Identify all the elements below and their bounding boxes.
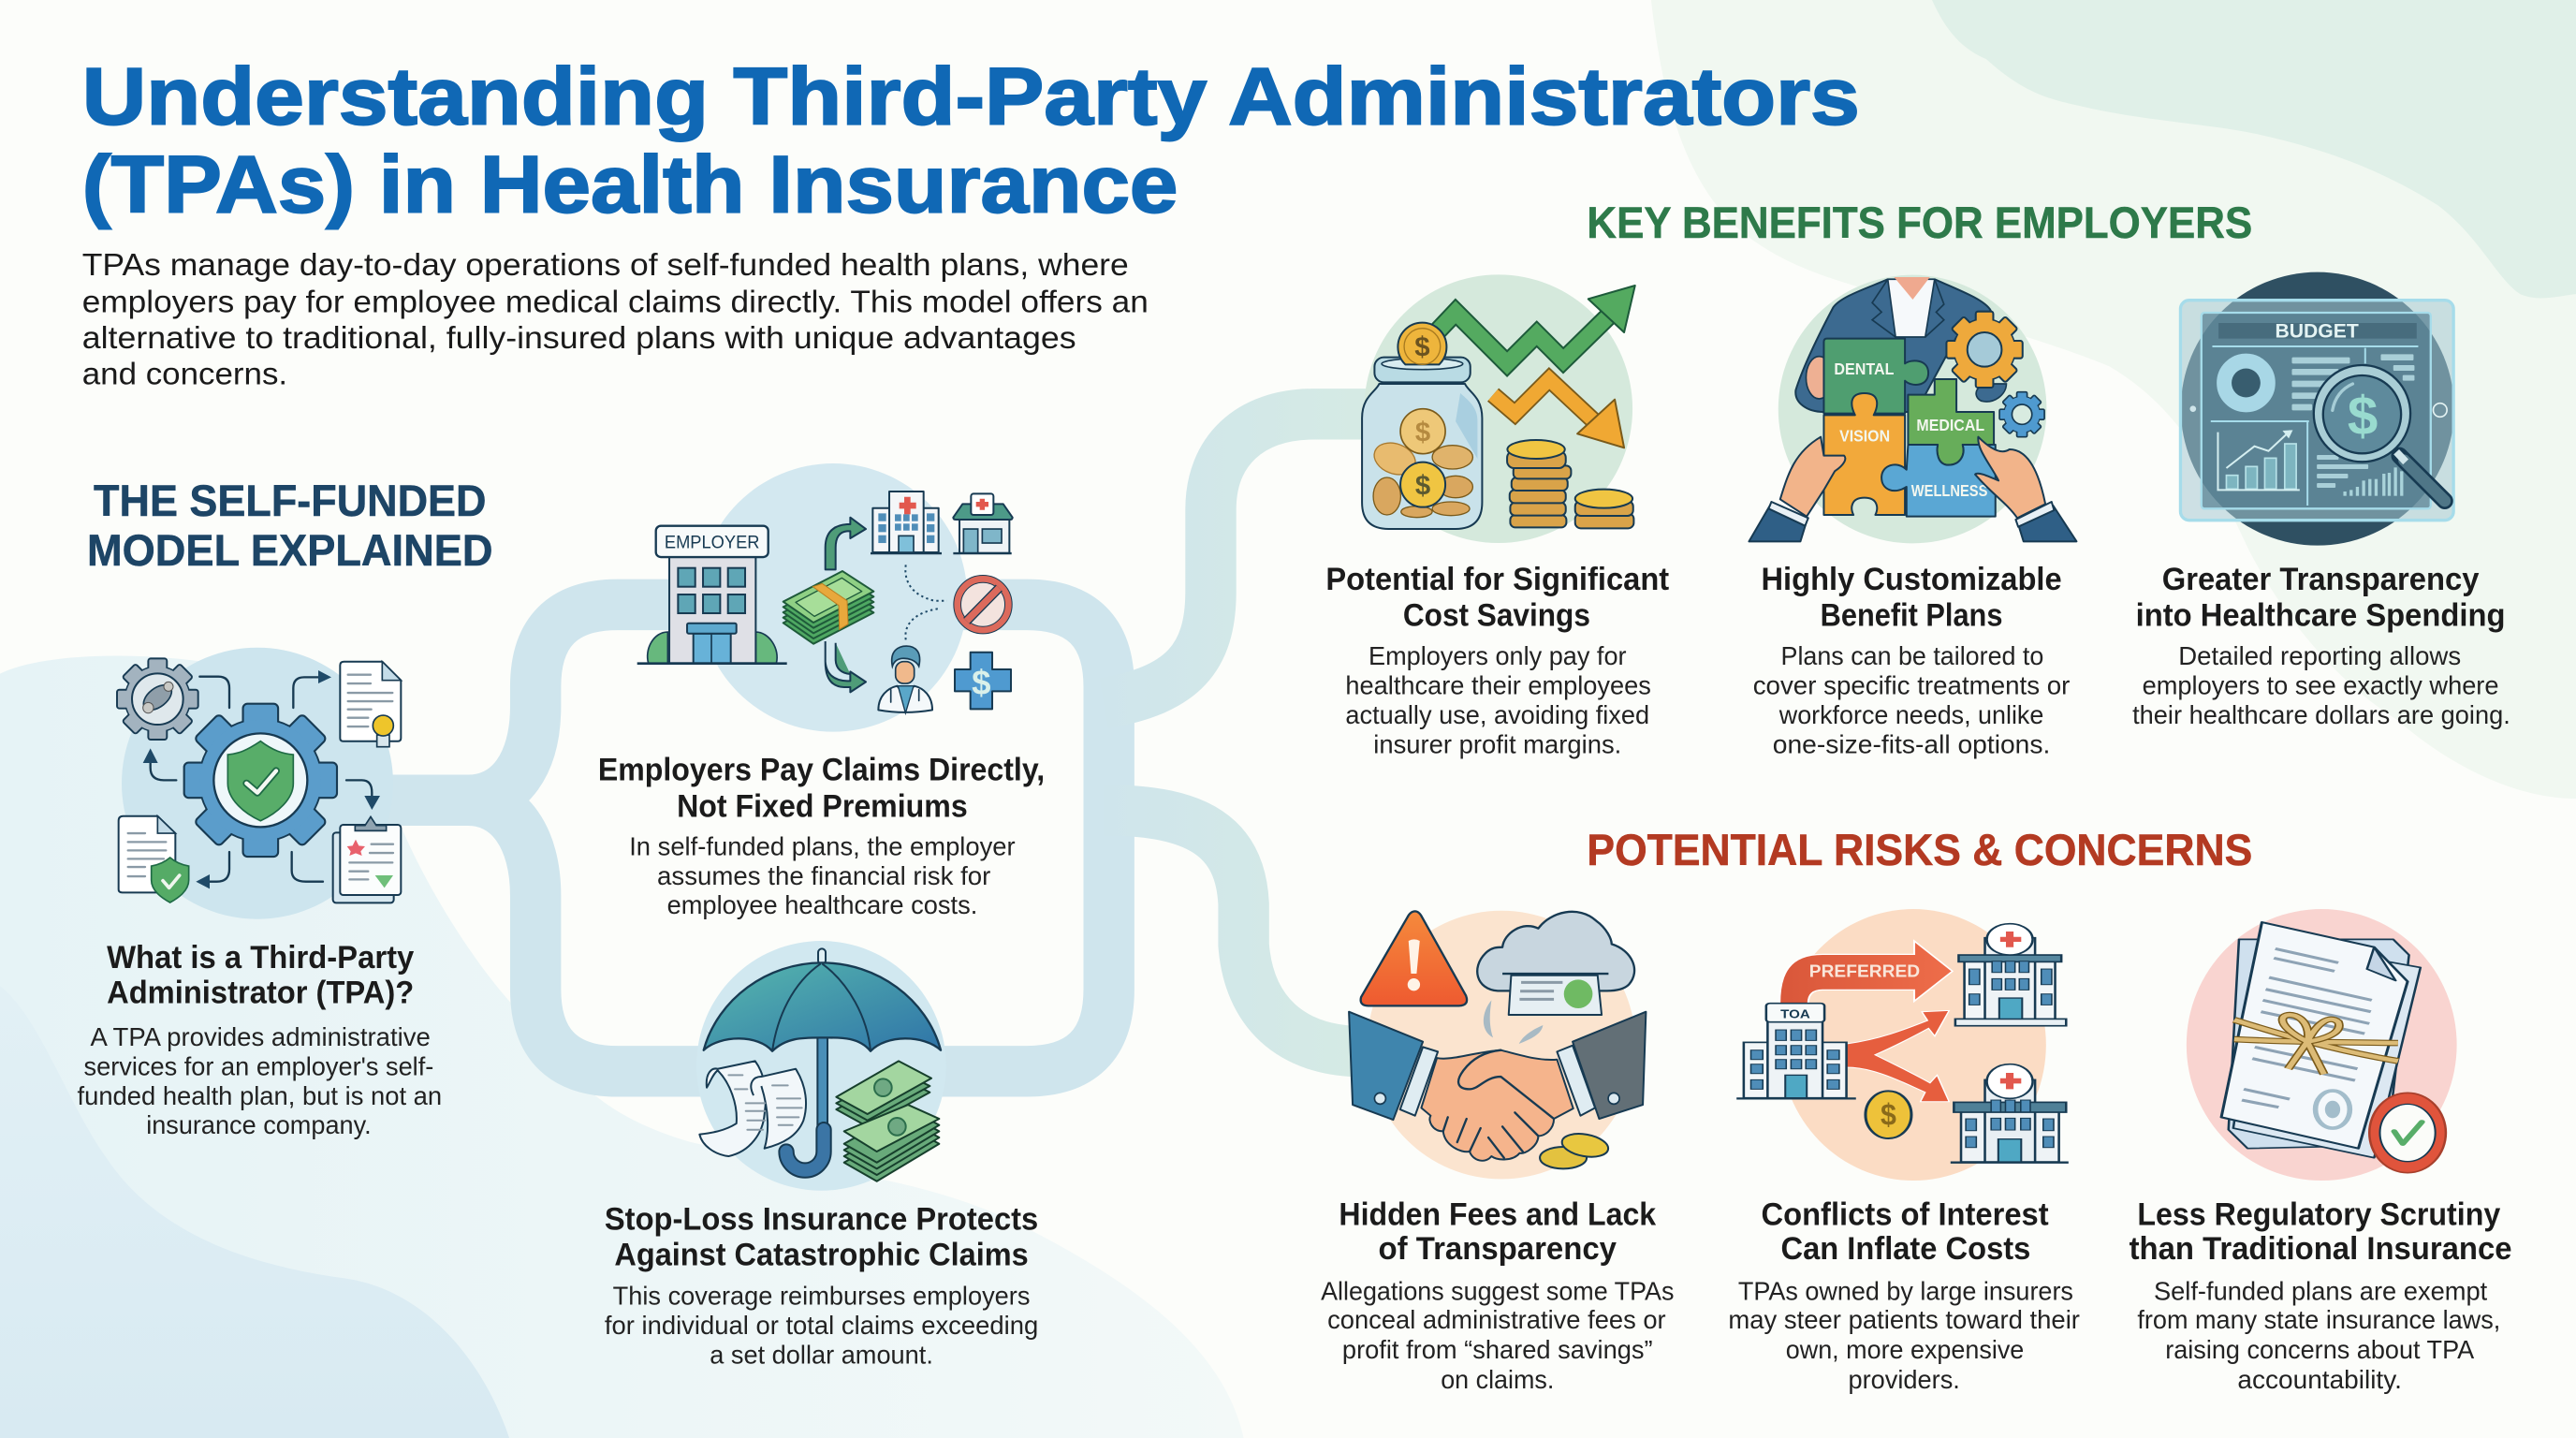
body text [77, 1022, 442, 1139]
intro paragraph: TPAs manage day-to-day operations of self-funded health plans, where [82, 248, 1129, 283]
background blob: darker green [1932, 0, 2576, 298]
panel: conflicts of interest [1728, 909, 2080, 1394]
panel: employers pay claims directly [598, 463, 1045, 919]
body text: workforce needs, unlike [1778, 700, 2043, 729]
panel: transparency [2132, 272, 2510, 729]
heading: Can Inflate Costs [1781, 1231, 2030, 1267]
icon: puzzle pieces, hands and suit: DENTAL [1834, 360, 1895, 378]
body text [1321, 1276, 1674, 1394]
intro paragraph: alternative to traditional, fully-insured plans with unique advantages [82, 321, 1076, 356]
body text [1753, 641, 2070, 759]
icon: employer paying hospitals and doctors: EMPLOYER [665, 533, 760, 552]
body text: their healthcare dollars are going. [2132, 700, 2510, 729]
body text: accountability. [2237, 1365, 2402, 1394]
panel: customizable plans [1749, 275, 2076, 759]
background blob: darker blue [0, 986, 509, 1438]
heading: Hidden Fees and Lack [1339, 1196, 1657, 1232]
icon: coin jar and trend arrows: $ [1414, 332, 1430, 363]
flow track: branch to risks [1104, 810, 1397, 1051]
panel: cost savings [1325, 274, 1670, 759]
body text: profit from “shared savings” [1342, 1335, 1653, 1364]
icon: puzzle pieces, hands and suit [1749, 275, 2076, 543]
body text: own, more expensive [1786, 1335, 2024, 1364]
heading: Not Fixed Premiums [677, 788, 968, 824]
icon: preferred arrow from TPA to hospitals: TOA [1780, 1006, 1810, 1020]
heading: than Traditional Insurance [2130, 1231, 2512, 1267]
panel: stop-loss insurance [605, 941, 1038, 1370]
icon: coin jar and trend arrows [1362, 274, 1635, 543]
heading [605, 1202, 1038, 1272]
icon: budget dashboard tablet [2180, 272, 2454, 546]
heading: Greater Transparency [2162, 562, 2479, 597]
heading: Employers Pay Claims Directly, [598, 753, 1045, 788]
panel: what is a TPA [77, 648, 442, 1139]
intro paragraph: employers pay for employee medical claims directly. This model offers an [82, 285, 1149, 319]
flow track: self-funded model loop [386, 605, 1109, 1071]
heading: Highly Customizable [1761, 562, 2062, 597]
icon: tied documents with seal [2187, 909, 2457, 1181]
body text: This coverage reimburses employers [613, 1282, 1030, 1311]
icon: TPA gears and documents [117, 648, 401, 919]
icon: preferred arrow from TPA to hospitals: $ [1881, 1098, 1896, 1132]
body text: Detailed reporting allows [2178, 641, 2461, 670]
icon: puzzle pieces, hands and suit: WELLNESS [1911, 481, 1987, 500]
body text [605, 1282, 1038, 1370]
background blob: light blue [0, 655, 1244, 1438]
heading: the self-funded model: MODEL EXPLAINED [87, 526, 493, 576]
heading: into Healthcare Spending [2136, 598, 2506, 634]
body text: healthcare their employees [1345, 670, 1651, 699]
title [82, 51, 1860, 229]
icon: budget dashboard tablet: $ [2348, 386, 2378, 447]
intro paragraph [82, 248, 1149, 392]
heading: Less Regulatory Scrutiny [2137, 1196, 2500, 1232]
flow track: branch to benefits [1104, 414, 1397, 703]
icon: preferred arrow from TPA to hospitals [1736, 909, 2069, 1181]
icon: coin jar and trend arrows: $ [1415, 471, 1430, 502]
body text: A TPA provides administrative [91, 1022, 431, 1051]
section heading: key benefits: KEY BENEFITS FOR EMPLOYERS [1587, 198, 2252, 248]
heading: Conflicts of Interest [1761, 1196, 2049, 1232]
heading: What is a Third-Party [107, 940, 414, 976]
icon: puzzle pieces, hands and suit: MEDICAL [1916, 416, 1984, 434]
body text: assumes the financial risk for [657, 861, 990, 890]
panel: less regulatory scrutiny [2130, 909, 2512, 1394]
heading: of Transparency [1379, 1231, 1617, 1267]
body text [1345, 641, 1651, 759]
icon: employer paying hospitals and doctors [637, 463, 1013, 732]
background blob: light green [1651, 0, 2576, 799]
body text: providers. [1848, 1365, 1960, 1394]
body text: cover specific treatments or [1753, 670, 2070, 699]
heading [598, 753, 1045, 824]
body text [1728, 1276, 2080, 1394]
body text: services for an employer's self- [84, 1052, 433, 1081]
body text: TPAs owned by large insurers [1738, 1276, 2073, 1305]
icon: employer paying hospitals and doctors: $ [972, 664, 991, 702]
heading [1761, 562, 2062, 634]
body text: insurer profit margins. [1373, 730, 1621, 759]
heading: Administrator (TPA)? [107, 976, 414, 1011]
body text [2137, 1276, 2500, 1394]
body text: actually use, avoiding fixed [1345, 700, 1649, 729]
icon: coin jar and trend arrows: $ [1415, 418, 1430, 448]
icon: handshake with warning sign and cloud [1349, 911, 1646, 1179]
body text: for individual or total claims exceeding [605, 1311, 1038, 1340]
heading: Against Catastrophic Claims [614, 1237, 1029, 1272]
heading [1339, 1196, 1657, 1267]
heading: Potential for Significant [1325, 562, 1670, 597]
heading [1761, 1196, 2049, 1267]
heading: Cost Savings [1403, 598, 1590, 634]
heading: the self-funded model [87, 477, 493, 576]
body text [629, 831, 1016, 919]
body text: one-size-fits-all options. [1773, 730, 2050, 759]
body text: Allegations suggest some TPAs [1321, 1276, 1674, 1305]
heading: Stop-Loss Insurance Protects [605, 1202, 1038, 1238]
icon: umbrella over claims and cash [696, 941, 946, 1191]
title: (TPAs) in Health Insurance [82, 139, 1178, 229]
intro paragraph: and concerns. [82, 358, 287, 392]
body text: employers to see exactly where [2143, 670, 2499, 699]
body text: funded health plan, but is not an [77, 1081, 442, 1110]
heading [107, 940, 414, 1011]
panel: hidden fees [1321, 911, 1674, 1394]
body text: Employers only pay for [1368, 641, 1627, 670]
heading: the self-funded model: THE SELF-FUNDED [94, 477, 487, 526]
icon: preferred arrow from TPA to hospitals: PREFERRED [1809, 961, 1920, 981]
heading: Benefit Plans [1821, 598, 2002, 634]
body text: Self-funded plans are exempt [2154, 1276, 2487, 1305]
heading [2136, 562, 2506, 634]
body text: may steer patients toward their [1728, 1305, 2080, 1334]
body text: on claims. [1441, 1365, 1554, 1394]
body text: from many state insurance laws, [2137, 1305, 2500, 1334]
body text [2132, 641, 2510, 729]
title: Understanding Third-Party Administrators [82, 51, 1860, 141]
icon: puzzle pieces, hands and suit: VISION [1839, 427, 1890, 446]
body text: insurance company. [146, 1110, 372, 1139]
heading [2130, 1196, 2512, 1267]
section heading: risks: POTENTIAL RISKS & CONCERNS [1587, 826, 2252, 875]
body text: In self-funded plans, the employer [629, 831, 1016, 860]
body text: Plans can be tailored to [1781, 641, 2043, 670]
body text: a set dollar amount. [710, 1341, 933, 1370]
body text: conceal administrative fees or [1327, 1305, 1666, 1334]
icon: budget dashboard tablet: BUDGET [2275, 320, 2359, 343]
heading [1325, 562, 1670, 634]
body text: raising concerns about TPA [2165, 1335, 2474, 1364]
body text: employee healthcare costs. [667, 890, 977, 919]
